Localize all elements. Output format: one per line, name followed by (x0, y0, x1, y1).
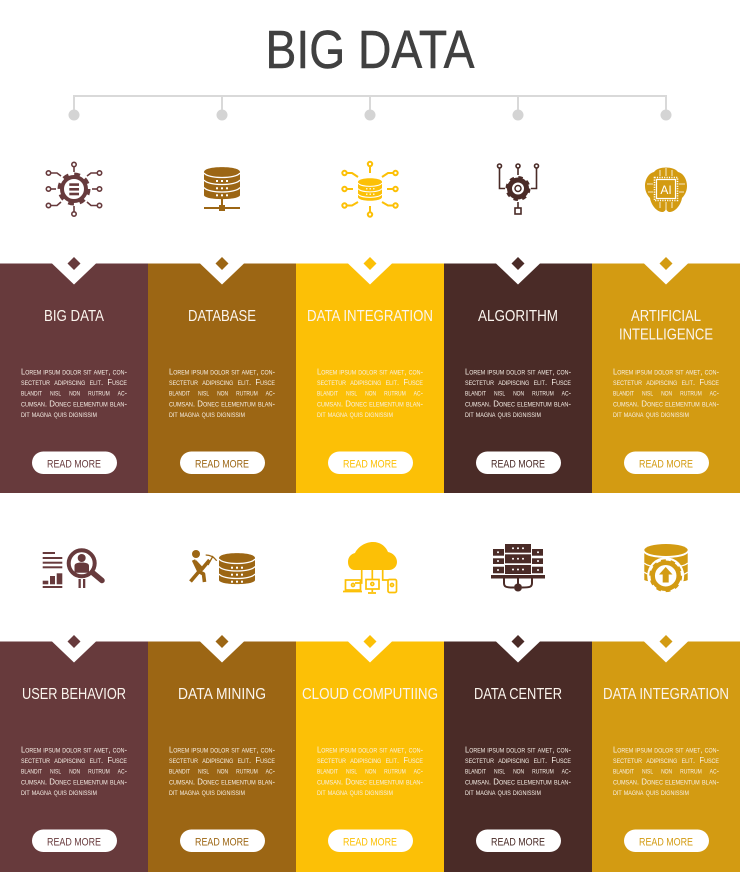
heading: DATABASE (188, 308, 256, 325)
diamond (216, 257, 228, 270)
body text (21, 744, 127, 797)
body text: sectetur adipiscing elit. Fusce (465, 755, 571, 765)
read more button: READ MORE (491, 458, 545, 470)
body text (465, 366, 571, 419)
body text: Lorem ipsum dolor sit amet, con- (613, 366, 719, 376)
panel: big data (0, 257, 148, 493)
read more button: READ MORE (47, 458, 101, 470)
body text: cumsan. Donec elementum blan- (317, 776, 423, 786)
notch (496, 262, 540, 284)
body text: sectetur adipiscing elit. Fusce (169, 755, 275, 765)
body text: blandit nisl non rutrum ac- (613, 388, 719, 398)
notch (52, 262, 96, 284)
heading: DATA MINING (178, 686, 266, 703)
panel: data integration (296, 257, 444, 493)
body text: cumsan. Donec elementum blan- (613, 398, 719, 408)
body text: blandit nisl non rutrum ac- (317, 766, 423, 776)
icon: big data gear (46, 162, 102, 216)
body text: dit magna quis dignissim (317, 787, 393, 797)
body text: dit magna quis dignissim (465, 409, 541, 419)
body text: Lorem ipsum dolor sit amet, con- (169, 366, 275, 376)
body text: Lorem ipsum dolor sit amet, con- (317, 744, 423, 754)
read more button (328, 830, 413, 852)
diamond (660, 635, 672, 648)
body text: cumsan. Donec elementum blan- (317, 398, 423, 408)
notch (348, 262, 392, 284)
body text: cumsan. Donec elementum blan- (465, 776, 571, 786)
body text: sectetur adipiscing elit. Fusce (21, 377, 127, 387)
body text: blandit nisl non rutrum ac- (317, 388, 423, 398)
icon: data mining (190, 550, 255, 584)
body text: sectetur adipiscing elit. Fusce (169, 377, 275, 387)
read more button: READ MORE (343, 458, 397, 470)
diamond (216, 635, 228, 648)
body text: Lorem ipsum dolor sit amet, con- (465, 744, 571, 754)
diamond (512, 635, 524, 648)
icon: artificial intelligence brain: AI (660, 183, 672, 197)
read more button: READ MORE (47, 836, 101, 848)
notch (52, 640, 96, 662)
diamond (512, 257, 524, 270)
title: BIG DATA (266, 20, 474, 80)
read more button (32, 452, 117, 474)
panel: cloud computing (296, 635, 444, 872)
read more button: READ MORE (195, 836, 249, 848)
body text (21, 366, 127, 419)
read more button (328, 452, 413, 474)
timeline connector (68, 96, 672, 120)
diamond (660, 257, 672, 270)
heading: INTELLIGENCE (619, 326, 713, 344)
notch (348, 640, 392, 662)
panel: artificial intelligence (592, 257, 740, 493)
body text: dit magna quis dignissim (169, 409, 245, 419)
read more button (624, 830, 709, 852)
body text: Lorem ipsum dolor sit amet, con- (169, 744, 275, 754)
body text: blandit nisl non rutrum ac- (613, 766, 719, 776)
diamond (364, 257, 376, 270)
icon: user behavior (43, 550, 102, 588)
icon: artificial intelligence brain (645, 168, 687, 212)
body text: dit magna quis dignissim (613, 409, 689, 419)
body text: blandit nisl non rutrum ac- (465, 766, 571, 776)
body text: dit magna quis dignissim (21, 787, 97, 797)
body text (613, 744, 719, 797)
body text: dit magna quis dignissim (613, 787, 689, 797)
icon: data integration upload (644, 544, 688, 594)
body text: Lorem ipsum dolor sit amet, con- (465, 366, 571, 376)
icon: algorithm gear (498, 164, 538, 214)
body text: blandit nisl non rutrum ac- (465, 388, 571, 398)
icon: data center (491, 544, 545, 592)
body text: dit magna quis dignissim (317, 409, 393, 419)
read more button (476, 830, 561, 852)
read more button (180, 452, 265, 474)
body text: cumsan. Donec elementum blan- (169, 776, 275, 786)
read more button (32, 830, 117, 852)
panel: database (148, 257, 296, 493)
body text: cumsan. Donec elementum blan- (21, 776, 127, 786)
read more button: READ MORE (343, 836, 397, 848)
body text: Lorem ipsum dolor sit amet, con- (613, 744, 719, 754)
body text: sectetur adipiscing elit. Fusce (465, 377, 571, 387)
body text: cumsan. Donec elementum blan- (169, 398, 275, 408)
heading: USER BEHAVIOR (22, 686, 126, 703)
body text: blandit nisl non rutrum ac- (169, 388, 275, 398)
notch (496, 640, 540, 662)
panel: data center (444, 635, 592, 872)
body text: sectetur adipiscing elit. Fusce (317, 377, 423, 387)
body text: sectetur adipiscing elit. Fusce (21, 755, 127, 765)
body text: cumsan. Donec elementum blan- (21, 398, 127, 408)
heading: CLOUD COMPUTIING (302, 686, 438, 703)
heading: BIG DATA (44, 308, 104, 325)
read more button: READ MORE (639, 836, 693, 848)
body text (465, 744, 571, 797)
body text: dit magna quis dignissim (465, 787, 541, 797)
notch (644, 262, 688, 284)
diamond (68, 635, 80, 648)
body text: Lorem ipsum dolor sit amet, con- (21, 744, 127, 754)
heading: DATA INTEGRATION (307, 308, 433, 325)
icon: data integration network (342, 162, 398, 217)
notch (200, 640, 244, 662)
heading: DATA CENTER (474, 686, 562, 703)
panel: user behavior (0, 635, 148, 872)
body text: blandit nisl non rutrum ac- (169, 766, 275, 776)
icon: cloud computing (343, 542, 397, 593)
body text: blandit nisl non rutrum ac- (21, 766, 127, 776)
read more button: READ MORE (195, 458, 249, 470)
read more button (180, 830, 265, 852)
panel: data mining (148, 635, 296, 872)
notch (200, 262, 244, 284)
body text: cumsan. Donec elementum blan- (613, 776, 719, 786)
panel: algorithm (444, 257, 592, 493)
body text: sectetur adipiscing elit. Fusce (317, 755, 423, 765)
body text: cumsan. Donec elementum blan- (465, 398, 571, 408)
diamond (68, 257, 80, 270)
heading: ARTIFICIAL (631, 308, 701, 325)
panel: data integration second (592, 635, 740, 872)
body text (169, 744, 275, 797)
body text: Lorem ipsum dolor sit amet, con- (21, 366, 127, 376)
body text: sectetur adipiscing elit. Fusce (613, 755, 719, 765)
body text (169, 366, 275, 419)
body text: Lorem ipsum dolor sit amet, con- (317, 366, 423, 376)
icon: database (204, 167, 240, 211)
body text: dit magna quis dignissim (21, 409, 97, 419)
notch (644, 640, 688, 662)
body text (317, 366, 423, 419)
heading: ALGORITHM (478, 308, 558, 325)
read more button (476, 452, 561, 474)
body text: blandit nisl non rutrum ac- (21, 388, 127, 398)
read more button (624, 452, 709, 474)
read more button: READ MORE (639, 458, 693, 470)
heading (619, 308, 713, 344)
body text (317, 744, 423, 797)
body text (613, 366, 719, 419)
diamond (364, 635, 376, 648)
body text: sectetur adipiscing elit. Fusce (613, 377, 719, 387)
body text: dit magna quis dignissim (169, 787, 245, 797)
read more button: READ MORE (491, 836, 545, 848)
